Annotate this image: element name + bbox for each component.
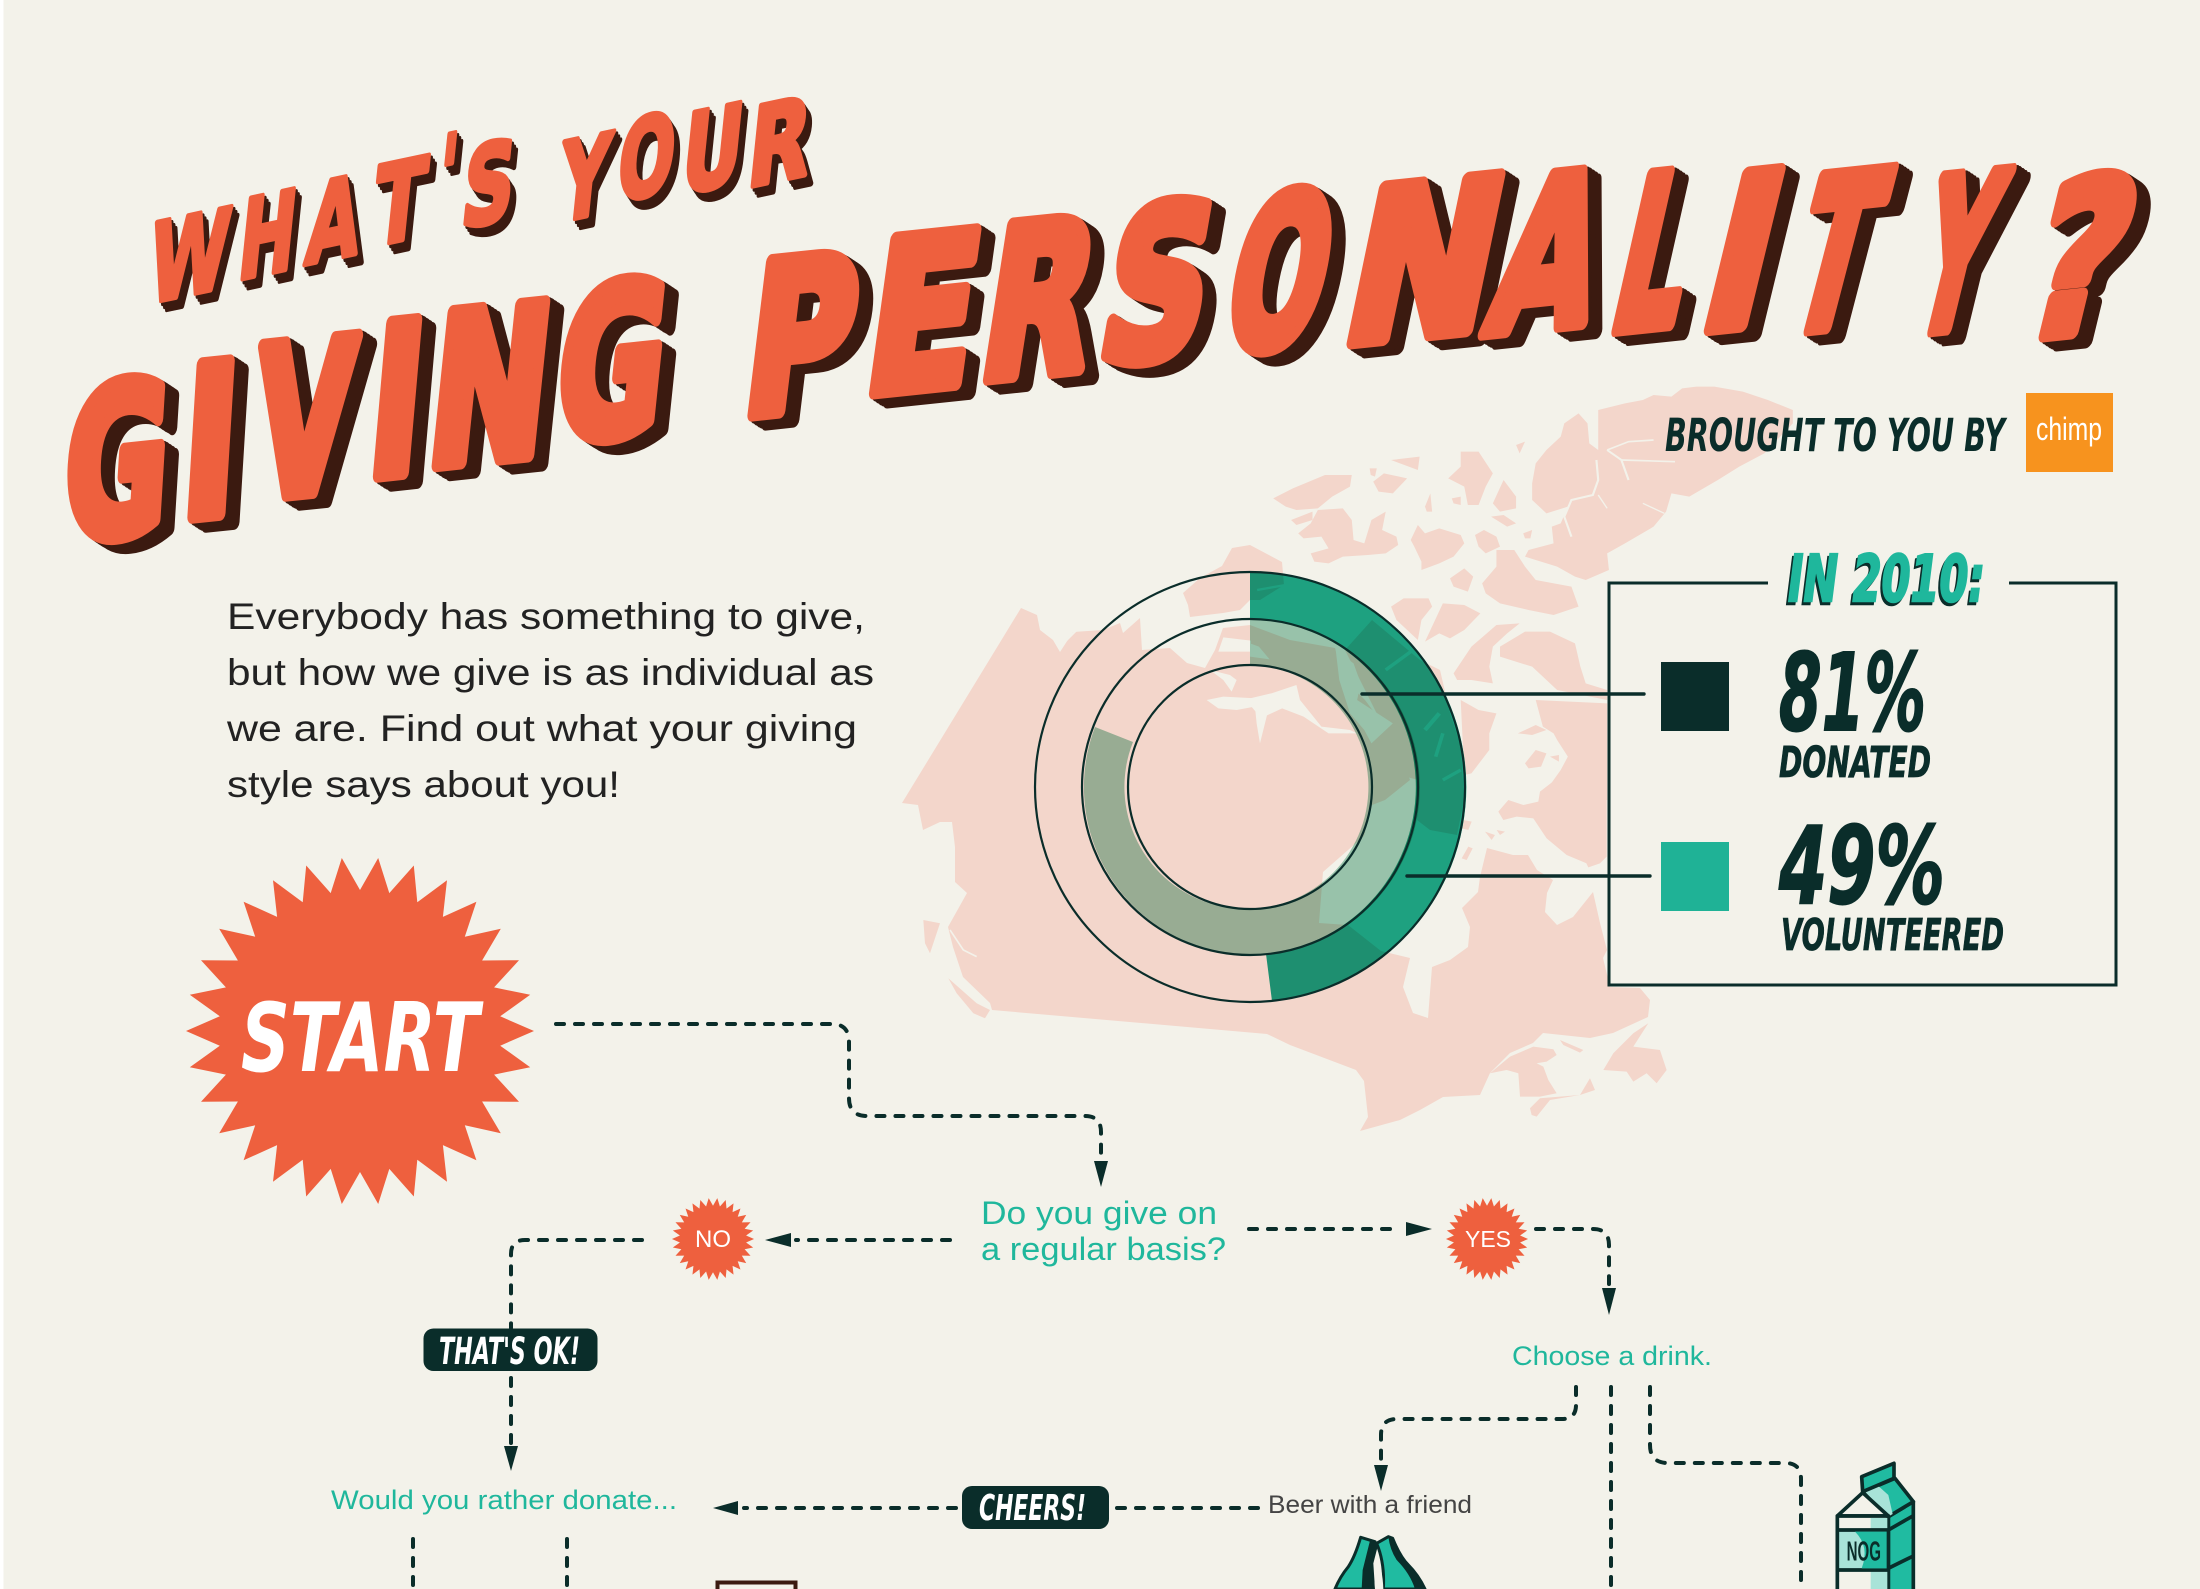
arrow: to beer <box>1374 1465 1388 1491</box>
arrow: to donate question <box>504 1446 518 1471</box>
donut chart: 81% donated, 49% volunteered <box>1035 572 1466 1002</box>
title line: giving personality? <box>58 127 2159 590</box>
title line: giving personality?: S <box>1085 158 1232 414</box>
badge: that's ok: THAT'S OK! <box>439 1330 580 1373</box>
title line: giving personality?: ? <box>2005 132 2159 389</box>
arrow: to donate <box>713 1501 738 1515</box>
flow line: yes to choose a drink <box>1536 1229 1609 1284</box>
title line: what's your: S <box>456 117 521 255</box>
title line: giving personality?: N <box>418 261 563 516</box>
icon: nog carton <box>1837 1463 1913 1589</box>
title line: giving personality?: I <box>361 278 434 527</box>
flow line: no to that's ok <box>511 1240 642 1328</box>
panel: in 2010 stats <box>1362 543 2116 985</box>
title line: giving personality?: N <box>1326 133 1524 394</box>
title line: what's your: H <box>233 165 303 306</box>
question: would you rather donate: Would you rather donate... <box>331 1485 677 1515</box>
title line: giving personality?: T <box>1768 127 1906 382</box>
stat: 81% donated: 81% <box>1779 632 1926 756</box>
burst: yes <box>1446 1198 1528 1280</box>
intro text: style says about you! <box>227 764 620 805</box>
title line: giving personality?: O <box>1209 145 1352 402</box>
title line: giving personality?: A <box>1471 127 1628 384</box>
title line: what's your: W <box>144 186 236 330</box>
stat: 49% volunteered: VOLUNTEERED <box>1781 910 2004 961</box>
title line: giving personality?: Y <box>1892 128 2023 383</box>
title line: what's your: U <box>676 80 749 221</box>
flow line: drink centre option <box>1609 1387 1613 1589</box>
intro text <box>226 596 874 805</box>
arrow: to choose a drink <box>1602 1288 1616 1315</box>
arrow: to no <box>765 1233 791 1247</box>
stat: 49% volunteered: 49% <box>1778 805 1945 929</box>
logo: chimp <box>2026 393 2113 472</box>
flow line: beer to cheers <box>1114 1506 1258 1510</box>
title line: giving personality?: V <box>248 295 362 548</box>
intro text: but how we give is as individual as <box>227 652 874 693</box>
title line: giving personality?: I <box>176 319 246 567</box>
title line: what's your: Y <box>553 109 617 249</box>
badge: cheers: CHEERS! <box>979 1488 1086 1529</box>
icon: beer bottles <box>1335 1537 1425 1589</box>
title line: what's your: T <box>368 134 432 273</box>
question: do you give on a regular basis: Do you give on <box>981 1195 1217 1231</box>
legend swatch: donated <box>1661 662 1729 731</box>
legend swatch: volunteered <box>1661 842 1729 911</box>
connector: donated <box>1362 692 1644 696</box>
heading: in 2010: IN 2010: <box>1788 543 1985 617</box>
title line: what's your: O <box>612 88 682 228</box>
title line: giving personality?: E <box>853 188 995 444</box>
title line: giving personality?: I <box>1682 128 1805 381</box>
flow line: question to yes <box>1249 1227 1400 1231</box>
title line: giving personality?: L <box>1594 127 1719 381</box>
title line: giving personality?: G <box>546 237 678 492</box>
flow line: drink to nog <box>1650 1387 1801 1589</box>
flow line: that's ok to donate question <box>509 1378 513 1443</box>
map of Canada <box>902 387 1793 1131</box>
logo: chimp: chimp <box>2036 411 2102 447</box>
title line: what's your: A <box>301 151 367 291</box>
question: do you give on a regular basis: a regular basis? <box>981 1231 1226 1267</box>
intro text: Everybody has something to give, <box>227 596 865 637</box>
arrow: to yes <box>1406 1222 1432 1236</box>
question: do you give on a regular basis <box>981 1195 1226 1267</box>
flow line: cheers to donate <box>744 1506 956 1510</box>
flow line: drink to beer <box>1381 1387 1576 1462</box>
badge: cheers <box>962 1486 1109 1529</box>
title line: giving personality?: G <box>58 336 176 590</box>
title line: giving personality?: P <box>733 210 870 465</box>
stat: 81% donated <box>1779 632 1931 788</box>
burst: no <box>672 1198 754 1280</box>
badge: that's ok <box>424 1328 598 1373</box>
connector: volunteered <box>1407 874 1650 878</box>
flow lines: donate options <box>413 1539 567 1589</box>
arrow: to question <box>1094 1161 1108 1187</box>
burst: no: NO <box>695 1226 731 1253</box>
flow line: question to no <box>796 1238 950 1242</box>
title line: what's your: ' <box>432 111 464 243</box>
burst: yes: YES <box>1465 1226 1511 1252</box>
intro text: we are. Find out what your giving <box>226 708 857 749</box>
stat: 81% donated: DONATED <box>1779 738 1931 788</box>
box icon <box>718 1582 796 1589</box>
question: choose a drink: Choose a drink. <box>1512 1341 1712 1371</box>
title line: what's your: R <box>743 73 817 214</box>
label: beer with a friend: Beer with a friend <box>1268 1491 1472 1519</box>
icon: nog carton: NOG <box>1847 1536 1881 1567</box>
flow line: start to question <box>556 1024 1101 1158</box>
start burst: START <box>241 984 484 1094</box>
title line: what's your <box>144 73 817 330</box>
brought to you by: BROUGHT TO YOU BY <box>1665 409 2008 462</box>
start burst <box>186 858 534 1204</box>
title line: giving personality?: R <box>967 172 1113 430</box>
